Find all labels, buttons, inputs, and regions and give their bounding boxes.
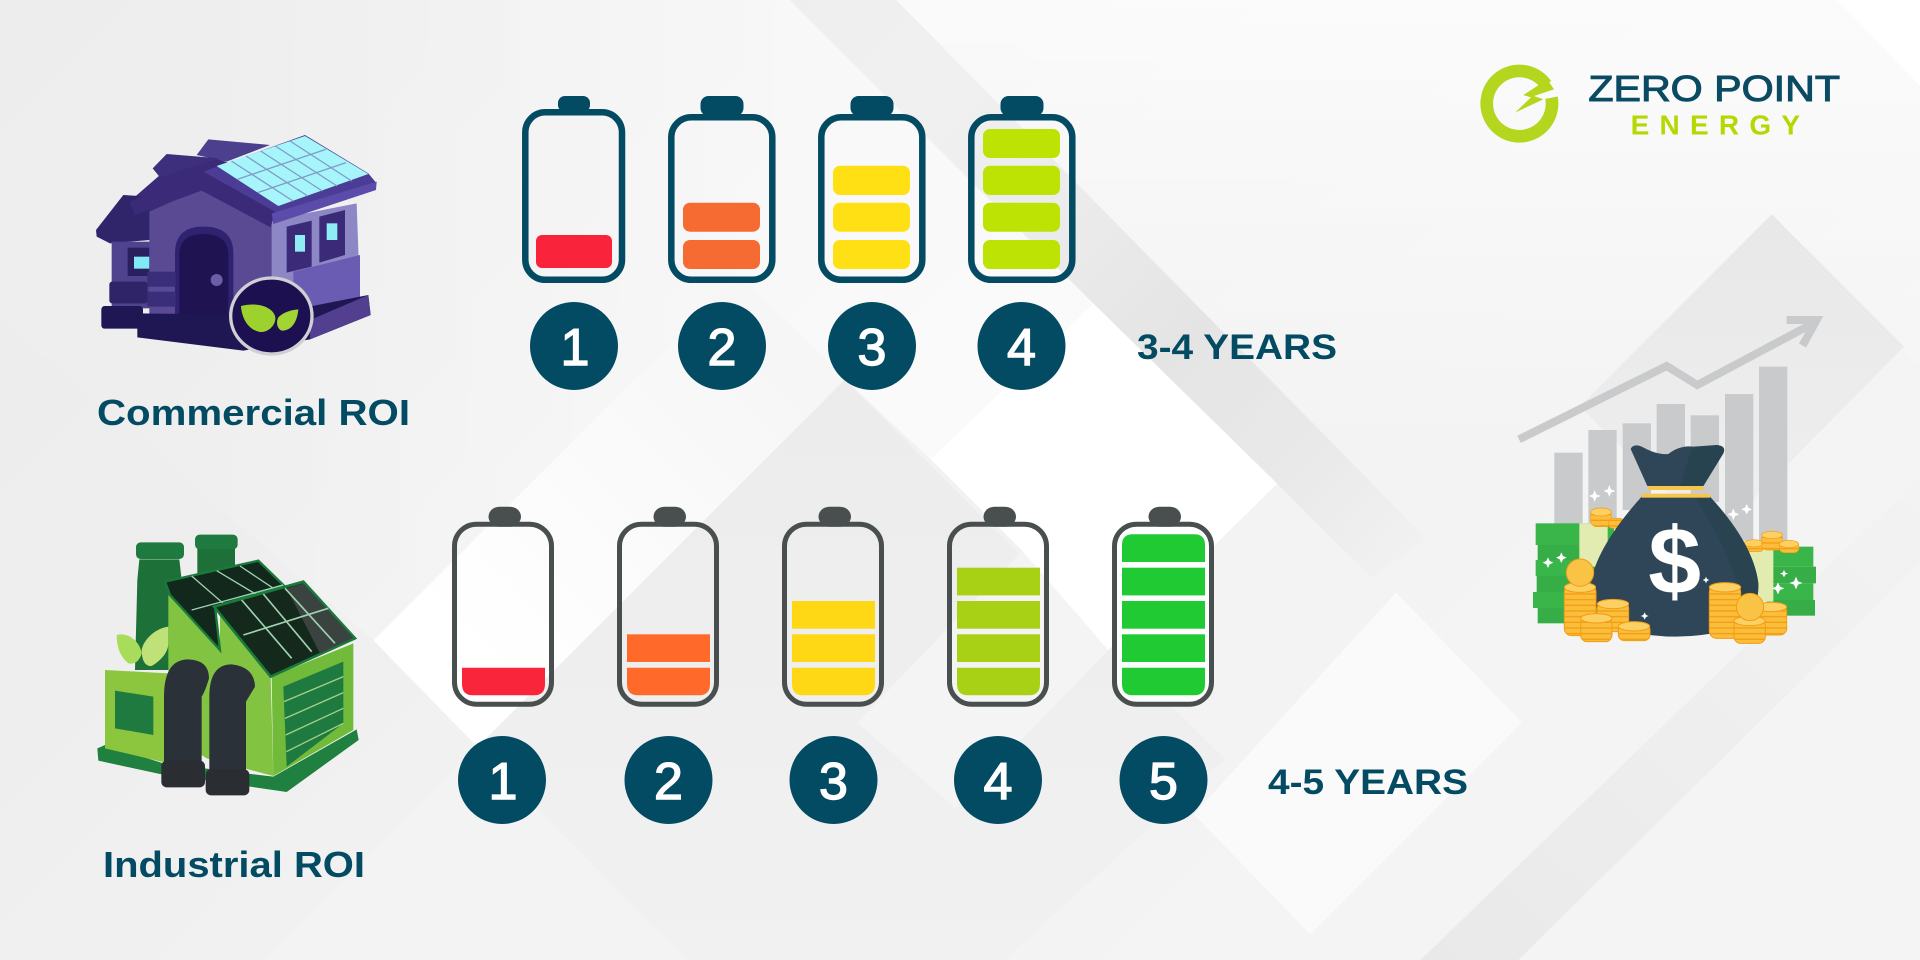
- battery 1 red: [525, 96, 622, 280]
- logo: Zero Point Energy: [1487, 68, 1840, 140]
- number badges: industrial: 2: [654, 753, 683, 811]
- small coins behind bag: [1591, 508, 1799, 553]
- money bag: [1591, 445, 1758, 637]
- cash stack right: [1748, 547, 1816, 616]
- battery row: commercial: [525, 96, 1072, 280]
- heading: Industrial ROI: Industrial ROI: [103, 844, 365, 885]
- industrial building icon: green factory with solar roof: [97, 535, 359, 795]
- growth bars: [1554, 367, 1787, 543]
- number badges: commercial: 4: [1007, 319, 1036, 377]
- battery 2 orange: [620, 507, 716, 704]
- number badges: industrial: 4: [984, 753, 1012, 811]
- windows: [287, 210, 345, 273]
- logo wordmark bottom: ENERGY: [1631, 109, 1800, 140]
- number badges: industrial: 1: [489, 753, 517, 811]
- label: 4-5 years: 4-5 YEARS: [1268, 763, 1468, 802]
- battery row: industrial: [454, 507, 1212, 704]
- illustration: money bag with rising chart: [1519, 316, 1823, 643]
- front solar panel: [214, 582, 355, 677]
- number badges: commercial: 3: [858, 319, 886, 377]
- label: 3-4 years: 3-4 YEARS: [1137, 328, 1337, 367]
- battery 1 red: [454, 507, 552, 704]
- battery 5 green: [1114, 507, 1212, 704]
- sparkles: [1543, 485, 1803, 620]
- number badges: industrial: 3: [819, 753, 848, 811]
- logo wordmark top: ZERO POINT: [1588, 68, 1840, 109]
- pipes: [161, 659, 255, 795]
- heading: Commercial ROI: Commercial ROI: [97, 392, 410, 433]
- back solar panel: [165, 561, 283, 650]
- battery 2 orange: [671, 96, 772, 280]
- battery 3 yellow: [821, 96, 922, 280]
- battery 4 olive: [950, 507, 1046, 704]
- number badges: industrial: 5: [1149, 753, 1178, 811]
- solar panels: [217, 136, 368, 206]
- louver panel: [283, 662, 343, 767]
- battery 4 lime: [971, 96, 1072, 280]
- number badges: commercial: 1: [561, 319, 589, 377]
- logo mark: ring with lightning bolt: [1487, 71, 1554, 136]
- leaf badge: [231, 278, 312, 354]
- battery 3 yellow: [784, 507, 882, 704]
- door: [175, 227, 233, 315]
- cash stack left: [1533, 523, 1614, 623]
- number badges: industrial: [458, 736, 1208, 824]
- number badges: commercial: [530, 302, 1066, 390]
- money bag: $: [1648, 508, 1701, 614]
- growth arrow: [1519, 316, 1823, 439]
- coin stacks front: [1564, 559, 1787, 643]
- commercial building icon: purple house with solar roof: [96, 135, 377, 354]
- number badges: commercial: 2: [708, 319, 736, 377]
